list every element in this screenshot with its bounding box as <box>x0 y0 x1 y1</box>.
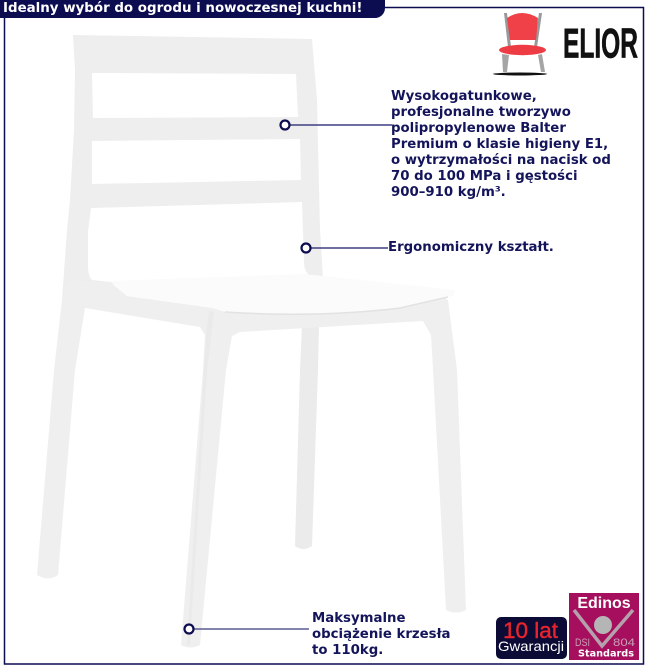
text: material description: Wysokogatunkowe, <box>391 89 537 104</box>
text: maximum load: to 110kg. <box>312 643 383 658</box>
callout marker: material <box>280 120 392 130</box>
title banner: Idealny wybór do ogrodu i nowoczesnej kuchni! <box>3 1 363 16</box>
badge: 10 year warranty: Gwarancji <box>498 638 564 654</box>
text: maximum load <box>312 611 450 658</box>
text: maximum load: Maksymalne <box>312 611 406 626</box>
text: material description: 70 do 100 MPa i gęstości <box>391 169 578 184</box>
text: material description: 900–910 kg/m³. <box>391 185 506 200</box>
badge: Edinos DSI 804 Standards: Edinos <box>577 595 631 612</box>
text: maximum load: obciążenie krzesła <box>312 627 450 642</box>
text: material description: Premium o klasie higieny E1, <box>391 137 608 152</box>
icon: red chair logo <box>493 13 547 76</box>
text: material description: profesjonalne tworzywo <box>391 105 571 120</box>
text: material description <box>391 89 611 200</box>
badge: Edinos DSI 804 Standards: Standards <box>578 648 634 660</box>
text: ergonomic shape: Ergonomiczny kształt. <box>388 240 554 255</box>
badge: Edinos DSI 804 Standards: 804 <box>613 637 635 649</box>
text: material description: o wytrzymałości na nacisk od <box>391 153 611 168</box>
badge: Edinos DSI 804 Standards <box>569 593 639 660</box>
callout marker: ergonomic shape <box>302 244 388 252</box>
text: material description: polipropylenowe Balter <box>391 121 566 136</box>
chair photo <box>37 35 466 648</box>
callout marker: maximum load <box>184 624 309 634</box>
badge: Edinos DSI 804 Standards: DSI <box>575 637 590 649</box>
badge: 10 year warranty: 10 lat <box>503 618 558 643</box>
badge: 10 year warranty <box>496 617 567 659</box>
